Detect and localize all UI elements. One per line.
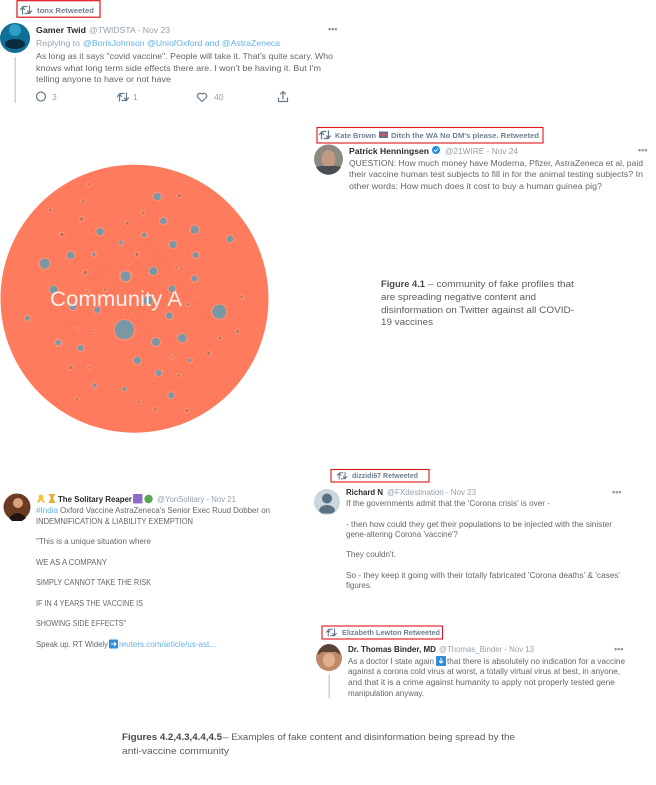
author line bbox=[349, 145, 647, 156]
tweet author line: @TWIDSTA - Nov 23 bbox=[89, 25, 170, 35]
tweet body bbox=[349, 158, 643, 191]
retweet banner: dizzidi67 bbox=[331, 470, 429, 482]
tweet body bbox=[348, 656, 625, 698]
caption: Figure 4.1 bbox=[381, 279, 574, 327]
tweet body: reuters.com/article/us-ast... bbox=[119, 639, 216, 649]
tweet: Richard N bbox=[314, 470, 621, 590]
author line: ••• bbox=[638, 145, 647, 155]
retweet banner: tonx bbox=[17, 1, 100, 17]
avatar: Gamer Twid bbox=[0, 23, 30, 53]
author line bbox=[346, 487, 621, 497]
avatar: Richard N bbox=[314, 489, 340, 515]
tweet author line: ••• bbox=[328, 24, 337, 34]
tweet body: Oxford Vaccine AstraZeneca's Senior Exec Ruud Dobber on bbox=[60, 505, 270, 515]
tweet body: "This is a unique situation where bbox=[36, 536, 151, 546]
avatar: Dr. Thomas Binder bbox=[316, 644, 342, 671]
tweet actions: 3 bbox=[52, 92, 57, 102]
author line with emoji icons bbox=[37, 494, 236, 504]
retweet banner: Kate Brown bbox=[317, 128, 543, 143]
caption: Figure 4.1: disinformation on Twitter against all COVID- bbox=[381, 305, 574, 315]
tweet body bbox=[36, 505, 270, 649]
tweet body: their vaccine human test subjects to fill in for the animal testing subjects? In bbox=[349, 169, 643, 179]
tweet body: Speak up. RT Widely bbox=[36, 639, 109, 649]
tweet author line: Gamer Twid bbox=[36, 25, 86, 35]
tweet: Gamer Twid bbox=[0, 1, 337, 103]
tweet actions: 40 bbox=[214, 92, 224, 102]
tweet body: They couldn't. bbox=[346, 549, 396, 559]
tweet body: that there is absolutely no indication for a vaccine bbox=[447, 656, 625, 666]
author line: @Thomas_Binder - Nov 13 bbox=[439, 644, 534, 654]
tweet body: INDEMNIFICATION & LIABILITY EXEMPTION bbox=[36, 516, 193, 526]
tweet body bbox=[346, 498, 620, 590]
community label: Community A bbox=[50, 288, 182, 311]
caption: Figures 4.2-4.5: anti-vaccine community bbox=[122, 746, 229, 756]
caption: Figures 4.2-4.5: – Examples of fake content and disinformation being spread by the bbox=[223, 732, 515, 742]
avatar: The Solitary Reaper bbox=[4, 494, 30, 521]
tweet body: against a corona cold virus at worst, a totally virtual virus at best, in anyone, bbox=[348, 666, 620, 676]
network graph: Community A bbox=[0, 165, 268, 433]
author line: Richard N bbox=[346, 487, 383, 497]
tweet body: telling anyone to have or not have bbox=[36, 74, 171, 84]
tweet body: other words: How much does it cost to buy a human guinea pig? bbox=[349, 181, 602, 191]
tweet body: gene-altering Corona 'vaccine'? bbox=[346, 529, 458, 539]
author line: Dr. Thomas Binder, MD bbox=[348, 644, 436, 654]
tweet body: SIMPLY CANNOT TAKE THE RISK bbox=[36, 577, 151, 587]
author line: @21WIRE - Nov 24 bbox=[445, 146, 518, 156]
tweet body: WE AS A COMPANY bbox=[36, 557, 107, 567]
caption: Figures 4.2-4.5 bbox=[122, 732, 515, 756]
tweet body: SHOWING SIDE EFFECTS" bbox=[36, 618, 126, 628]
avatar: Patrick Henningsen bbox=[314, 144, 343, 175]
tweet body: So - they keep it going with their totally fabricated 'Corona deaths' & 'cases' bbox=[346, 570, 620, 580]
author line with emoji icons: @YonSolitary - Nov 21 bbox=[157, 494, 236, 504]
retweet banner: Elizabeth Lewton: Elizabeth Lewton Retweeted bbox=[342, 628, 440, 637]
tweet body: IF IN 4 YEARS THE VACCINE IS bbox=[36, 598, 143, 608]
retweet banner: dizzidi67: dizzidi67 Retweeted bbox=[352, 471, 418, 480]
tweet body: - then how could they get their populations to be injected with the sinister bbox=[346, 519, 612, 529]
tweet body: knows what long term side effects there are. I won't be having it. But I'm bbox=[36, 63, 321, 73]
author line with emoji icons: The Solitary Reaper bbox=[58, 494, 133, 504]
replying line: @BorisJohnson @UniofOxford and @AstraZeneca bbox=[83, 38, 280, 48]
tweet body: figures. bbox=[346, 580, 372, 590]
retweet banner: Elizabeth Lewton bbox=[322, 626, 442, 639]
retweet banner: tonx: tonx Retweeted bbox=[37, 6, 94, 15]
tweet: The Solitary Reaper bbox=[4, 494, 270, 649]
tweet body: As a doctor I state again bbox=[348, 656, 434, 666]
author line: @FXdestination - Nov 23 bbox=[387, 487, 476, 497]
author line bbox=[348, 644, 623, 654]
author line: ••• bbox=[612, 487, 621, 497]
tweet body: manipulation anyway. bbox=[348, 688, 424, 698]
retweet banner: Kate Brown: Ditch the WA No DM's please. Retweeted bbox=[391, 131, 539, 140]
caption: Figure 4.1: – community of fake profiles that bbox=[428, 279, 574, 289]
tweet actions: 1 bbox=[133, 92, 138, 102]
tweet body: As long as it says "covid vaccine". People will take it. That's quite scary. Who bbox=[36, 51, 333, 61]
tweet body: If the governments admit that the 'Corona crisis' is over - bbox=[346, 498, 550, 508]
tweet body bbox=[36, 51, 333, 84]
caption: Figure 4.1: 19 vaccines bbox=[381, 317, 433, 327]
tweet: Dr. Thomas Binder bbox=[316, 626, 625, 698]
caption: Figure 4.1: are spreading negative content and bbox=[381, 292, 536, 302]
tweet body: QUESTION: How much money have Moderna, Pfizer, AstraZeneca et al, paid bbox=[349, 158, 643, 168]
tweet actions bbox=[36, 92, 288, 102]
caption: Figure 4.1: Figure 4.1 bbox=[381, 279, 425, 289]
tweet author line bbox=[36, 24, 337, 35]
replying line: Replying to bbox=[36, 38, 80, 48]
author line: Patrick Henningsen bbox=[349, 146, 429, 156]
tweet: Patrick Henningsen bbox=[314, 128, 647, 191]
retweet banner: Kate Brown: Kate Brown bbox=[335, 131, 376, 140]
author line: ••• bbox=[614, 644, 623, 654]
tweet body: and that it is a crime against humanity to apply not properly tested gene bbox=[348, 677, 615, 687]
tweet body: #India bbox=[36, 505, 58, 515]
caption: Figures 4.2-4.5: Figures 4.2,4.3,4.4,4.5 bbox=[122, 732, 222, 742]
